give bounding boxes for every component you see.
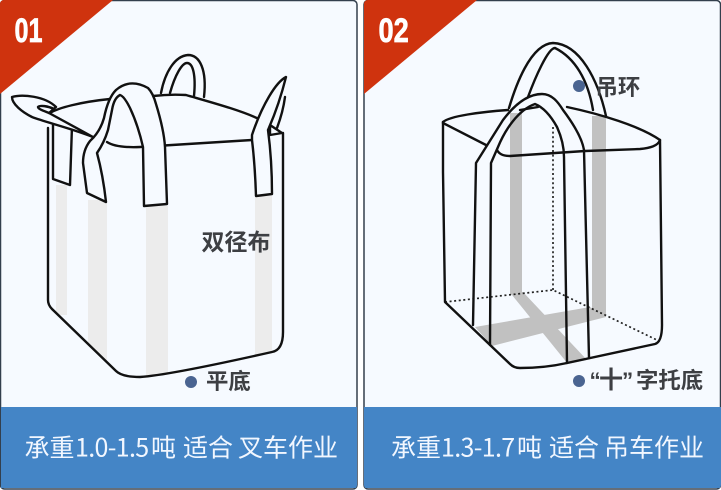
footer bar: 承重1.0-1.5吨: 适合 <box>183 428 233 464</box>
label: 双径布: 双径布 <box>202 229 270 255</box>
label: 十字托底 with dot: 字托底 <box>636 368 703 393</box>
illustration: cross-bottom bag <box>443 43 662 368</box>
footer bar: 承重1.3-1.7吨: 承重 <box>391 428 441 464</box>
badge: red corner triangle 02 <box>364 0 477 94</box>
label: 平底 with dot <box>185 369 251 394</box>
label: 十字托底 with dot: ” <box>622 368 633 393</box>
footer bar: 承重1.0-1.5吨: 承重 <box>24 428 75 464</box>
footer bar: 承重1.0-1.5吨 <box>1 407 357 488</box>
footer bar: 承重1.3-1.7吨 <box>364 407 721 488</box>
label: 平底 with dot: 平底 <box>206 369 251 394</box>
footer bar: 承重1.3-1.7吨: 吨 <box>517 428 542 464</box>
footer bar: 承重1.0-1.5吨: 吨 <box>151 428 176 464</box>
panel: 02 cross-bottom crane bag <box>364 0 721 489</box>
label: 十字托底 with dot: “ <box>590 368 601 393</box>
label: 十字托底 with dot <box>573 367 703 394</box>
footer bar: 承重1.3-1.7吨: 1.3-1.7 <box>441 428 515 464</box>
badge: red corner triangle 01 <box>0 0 113 94</box>
badge: red corner triangle 02: 02 <box>378 11 409 50</box>
footer bar: 承重1.3-1.7吨: 吊车作业 <box>604 428 704 464</box>
panel: 01 flat-bottom forklift bag <box>0 0 357 489</box>
badge: red corner triangle 01: 01 <box>14 12 42 50</box>
footer bar: 承重1.0-1.5吨: 1.0-1.5 <box>75 428 149 464</box>
label: 吊环 with dot: 吊环 <box>596 75 640 100</box>
label: 吊环 with dot <box>573 75 640 100</box>
footer bar: 承重1.0-1.5吨: 叉车作业 <box>238 428 338 464</box>
label: 十字托底 with dot: 十 <box>599 367 623 394</box>
illustration: flat-bottom bag <box>12 55 286 381</box>
footer bar: 承重1.3-1.7吨: 适合 <box>549 428 599 464</box>
